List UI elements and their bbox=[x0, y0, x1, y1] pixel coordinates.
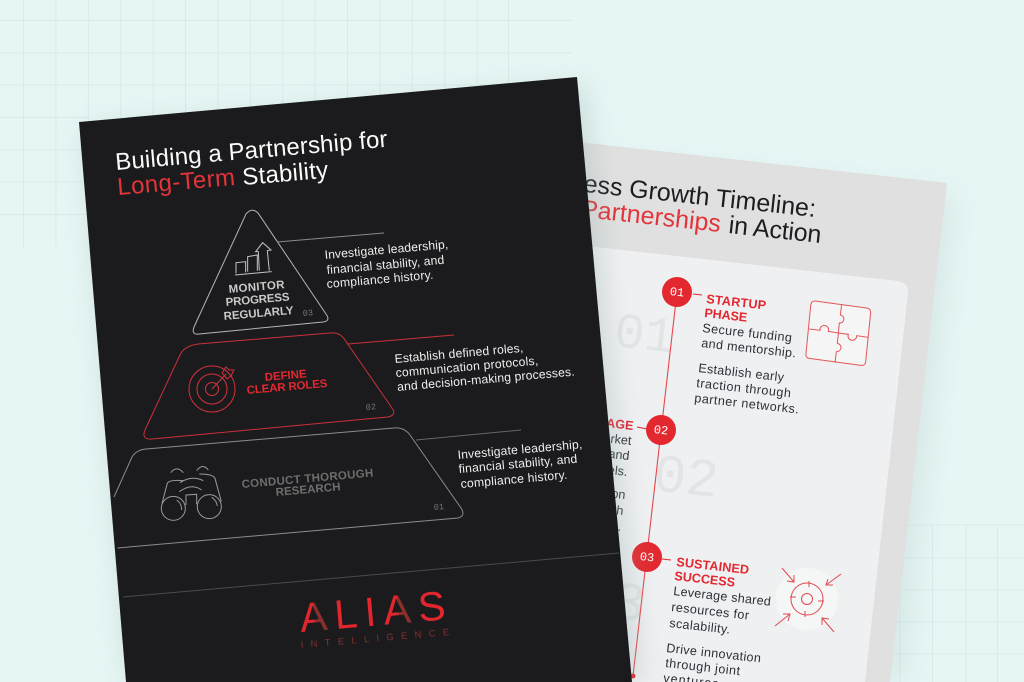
step 03: through joint bbox=[665, 656, 741, 678]
step 01: Secure funding bbox=[702, 321, 793, 345]
pyramid tier: monitor progress regularly: 03 bbox=[302, 308, 313, 319]
description: tier 2: Establish defined roles, bbox=[394, 341, 524, 366]
timeline title: in Action bbox=[727, 211, 823, 249]
timeline line bbox=[633, 292, 677, 676]
description: tier 2 bbox=[394, 341, 575, 394]
step 01: 01 bbox=[669, 285, 685, 301]
description: tier 3: compliance history. bbox=[326, 268, 434, 291]
timeline title bbox=[520, 163, 823, 249]
ghost numerals: 01 bbox=[611, 305, 677, 368]
pyramid tier: monitor progress regularly: PROGRESS bbox=[225, 291, 290, 309]
step 01: and mentorship. bbox=[701, 336, 797, 360]
timeline title: Partnerships bbox=[580, 195, 722, 238]
description: tier 1: compliance history. bbox=[460, 468, 568, 491]
step 03 bbox=[632, 542, 772, 682]
step 02: els. bbox=[607, 463, 628, 479]
icon: binoculars bbox=[161, 466, 221, 520]
pyramid tier: conduct thorough research: RESEARCH bbox=[275, 481, 341, 499]
step 01 bbox=[662, 277, 800, 417]
panel: business growth timeline page bbox=[520, 140, 955, 682]
step 02: h bbox=[616, 503, 624, 518]
pyramid tier: conduct thorough research bbox=[114, 428, 521, 548]
pyramid tier: define clear roles: 02 bbox=[365, 402, 376, 413]
panel: partnership stability page bbox=[79, 77, 640, 682]
step 03: 03 bbox=[639, 550, 655, 566]
step 03: SUSTAINED bbox=[676, 555, 750, 577]
pyramid tier: define clear roles bbox=[144, 333, 454, 439]
timeline title: Business Growth Timeline: bbox=[520, 163, 817, 223]
logo: Alias Intelligence: INTELLIGENCE bbox=[300, 627, 450, 651]
step 03: scalability. bbox=[669, 616, 731, 637]
description: tier 1: Investigate leadership, bbox=[457, 437, 583, 462]
step 02: 02 bbox=[653, 423, 669, 439]
step 02: AGE bbox=[606, 416, 634, 433]
step 03: resources for bbox=[671, 600, 750, 623]
logo: Alias Intelligence: ALIAS bbox=[298, 582, 447, 641]
timeline card bbox=[560, 244, 908, 682]
heading: Stability bbox=[241, 157, 329, 191]
ghost numerals: 02 bbox=[650, 446, 721, 514]
step 02: rket bbox=[610, 432, 633, 448]
step 03: Drive innovation bbox=[666, 641, 762, 665]
description: tier 2: and decision-making processes. bbox=[397, 365, 575, 394]
pyramid tier: monitor progress regularly bbox=[193, 210, 384, 334]
step 03: SUCCESS bbox=[674, 569, 736, 590]
step 02 bbox=[606, 415, 676, 534]
pyramid tier: conduct thorough research: 01 bbox=[433, 502, 444, 513]
icon: puzzle bbox=[806, 301, 871, 365]
heading: Building a Partnership for bbox=[114, 126, 389, 176]
step 03: Leverage shared bbox=[673, 584, 772, 609]
icon: target with dart bbox=[189, 366, 235, 412]
step 01: partner networks. bbox=[694, 391, 800, 417]
pyramid tier: define clear roles: CLEAR ROLES bbox=[246, 378, 328, 397]
step 02: and bbox=[608, 447, 630, 463]
description: tier 1 bbox=[457, 437, 583, 491]
pyramid tier: conduct thorough research: CONDUCT THOROUGH bbox=[241, 468, 374, 491]
step 01: traction through bbox=[696, 376, 792, 400]
step 01: PHASE bbox=[704, 306, 748, 325]
description: tier 3: financial stability, and bbox=[326, 253, 445, 277]
ghost numerals bbox=[577, 305, 721, 638]
step 01: Establish early bbox=[698, 361, 785, 384]
ghost numerals: 03 bbox=[577, 570, 648, 638]
description: tier 3: Investigate leadership, bbox=[324, 237, 449, 262]
description: tier 2: communication protocols, bbox=[395, 354, 539, 380]
description: tier 1: financial stability, and bbox=[458, 452, 578, 476]
pyramid tier: define clear roles: DEFINE bbox=[264, 368, 307, 384]
pyramid tier: monitor progress regularly: MONITOR bbox=[228, 279, 286, 296]
icon: bar chart with arrow bbox=[235, 243, 272, 275]
heading: Long-Term bbox=[116, 164, 236, 201]
pyramid tier: monitor progress regularly: REGULARLY bbox=[223, 305, 294, 323]
description: tier 3 bbox=[324, 237, 449, 291]
step 02: . bbox=[617, 520, 622, 534]
heading bbox=[114, 126, 389, 201]
step 02: on bbox=[611, 487, 626, 502]
icon: target with converging arrows bbox=[775, 568, 841, 632]
step 01: STARTUP bbox=[706, 292, 767, 313]
